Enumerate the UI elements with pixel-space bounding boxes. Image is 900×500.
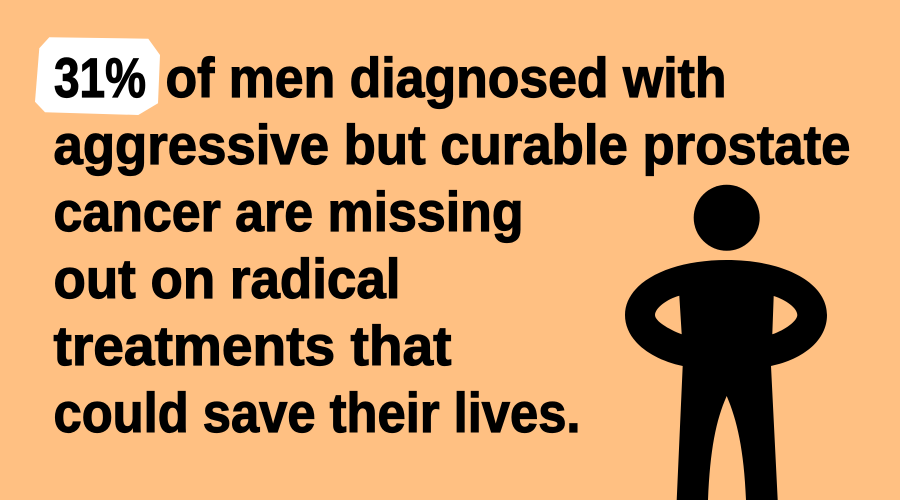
headline text: cancer are missing bbox=[54, 180, 524, 243]
headline text: could save their lives. bbox=[54, 381, 580, 444]
headline text: treatments that bbox=[54, 314, 452, 377]
headline text bbox=[54, 46, 850, 444]
headline text: aggressive but curable prostate bbox=[54, 113, 850, 176]
highlighted statistic: 31% bbox=[54, 46, 146, 109]
icon: standing man with hands on hips bbox=[625, 185, 827, 500]
highlighted statistic bbox=[35, 37, 160, 115]
headline text: of men diagnosed with bbox=[166, 46, 726, 109]
headline text: out on radical bbox=[54, 247, 400, 310]
